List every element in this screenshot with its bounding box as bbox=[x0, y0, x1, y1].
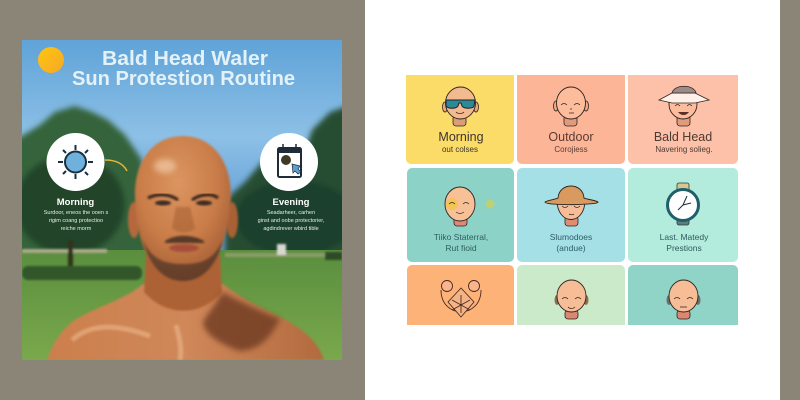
label: Slumodoes bbox=[550, 232, 592, 242]
icon: calm bald face bbox=[666, 280, 700, 319]
ears bbox=[128, 202, 140, 238]
card: Slumodoes bbox=[517, 168, 625, 262]
label: Corojiess bbox=[554, 145, 588, 154]
title: Sun Protestion Routine bbox=[72, 68, 295, 90]
trees bbox=[15, 105, 355, 260]
evening text bbox=[258, 197, 325, 232]
morning text: rigim coang protectioo bbox=[49, 218, 103, 224]
label bbox=[548, 130, 594, 154]
brows bbox=[148, 195, 218, 200]
icon: clock bbox=[668, 183, 698, 225]
evening text: Seadarheer, carhen bbox=[267, 210, 315, 216]
evening icon bbox=[260, 133, 318, 191]
label: Outdoor bbox=[548, 130, 594, 144]
label: Morning bbox=[438, 130, 484, 144]
title bbox=[72, 50, 294, 85]
icon: face with sunglasses bbox=[442, 87, 478, 126]
eyes bbox=[155, 200, 171, 206]
morning text: Morning bbox=[57, 197, 94, 208]
shoulder shadow bbox=[203, 292, 280, 351]
label bbox=[438, 130, 484, 154]
card: Bald Head bbox=[628, 75, 738, 164]
card: Outdoor bbox=[517, 75, 625, 164]
label: Rut fioid bbox=[445, 243, 477, 253]
card: Morning bbox=[406, 75, 514, 164]
evening text: agdindrever wbird tible bbox=[263, 226, 319, 232]
beard bbox=[143, 240, 223, 281]
nose bbox=[172, 207, 195, 232]
label: out colses bbox=[442, 145, 478, 154]
card: Last Matedy bbox=[628, 168, 738, 262]
icon: face with sun hat bbox=[659, 86, 709, 126]
morning text: Surdoor, eneos the ooen s bbox=[44, 210, 109, 216]
man bbox=[47, 136, 324, 360]
card: calm face bbox=[628, 265, 738, 325]
label bbox=[654, 130, 713, 154]
neck bbox=[144, 255, 222, 311]
label: Last. Matedy bbox=[660, 232, 709, 242]
label: Tiiko Staterral, bbox=[434, 232, 488, 242]
label: Navering solieg. bbox=[655, 145, 713, 154]
scalp highlight bbox=[154, 159, 176, 173]
label: Bald Head bbox=[654, 130, 712, 144]
card: hands icon bbox=[407, 265, 514, 325]
grass bbox=[22, 250, 342, 360]
evening text: Evening bbox=[273, 197, 310, 208]
icon: smiling bald face bbox=[554, 280, 588, 319]
park path and shadows bbox=[22, 240, 342, 280]
label: Prestions bbox=[666, 243, 702, 253]
label bbox=[550, 232, 592, 253]
icon: face with sun glare bbox=[445, 187, 494, 226]
torso bbox=[47, 284, 324, 360]
white panel bbox=[365, 0, 780, 400]
sky bbox=[22, 40, 342, 255]
morning text bbox=[44, 198, 108, 230]
icon: cupped hands bbox=[441, 280, 481, 317]
card: smiling face bbox=[517, 265, 625, 325]
label: (andue) bbox=[556, 243, 586, 253]
photo panel: bald man in park bbox=[15, 40, 355, 360]
icon: face with brown hat bbox=[545, 186, 598, 226]
label bbox=[660, 232, 709, 253]
head bbox=[135, 136, 231, 281]
chest highlights bbox=[72, 325, 181, 360]
arrow bbox=[105, 160, 127, 171]
evening text: ginst and oobe protectorier, bbox=[258, 218, 325, 224]
morning icon bbox=[46, 133, 104, 191]
title: Bald Head Waler bbox=[102, 48, 268, 70]
label bbox=[434, 232, 488, 253]
sun icon bbox=[38, 47, 64, 73]
lips bbox=[169, 244, 199, 252]
card: Take Sunscreen bbox=[407, 168, 514, 262]
morning text: reiche morm bbox=[61, 226, 92, 232]
icon: calm face bbox=[554, 87, 588, 126]
